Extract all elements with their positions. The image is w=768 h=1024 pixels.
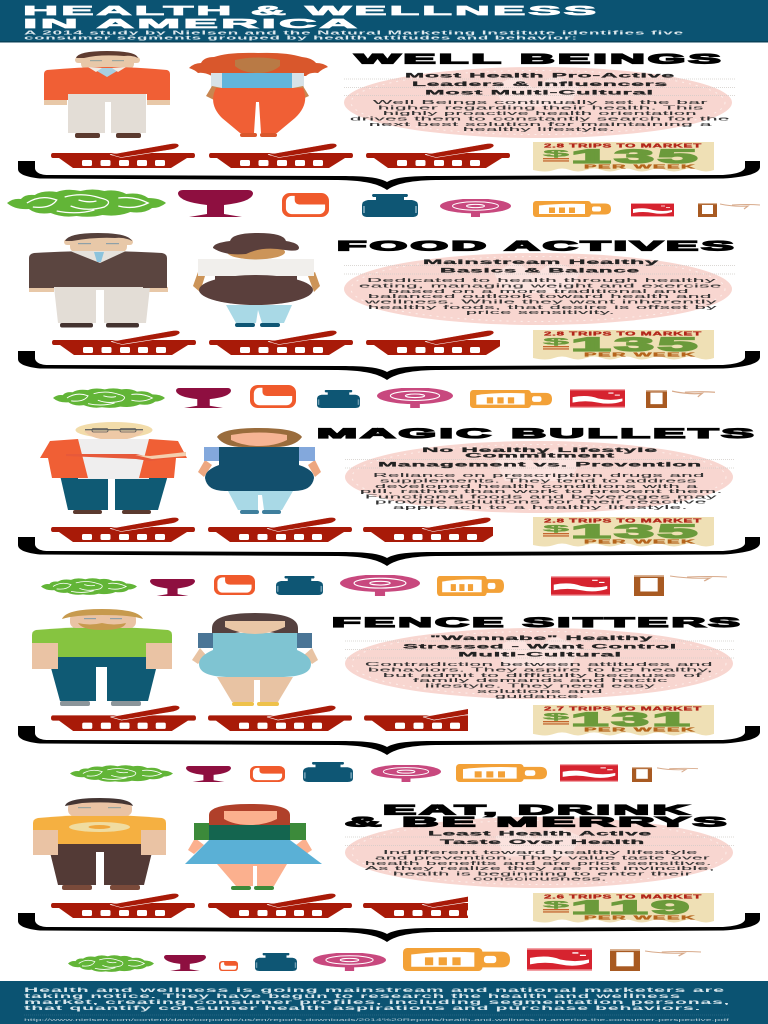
traits and description: and prevention. They value taste over [375, 856, 710, 862]
traits and description: Well Beings continually set the bar [373, 100, 708, 106]
curly brace [18, 726, 760, 755]
figure: woman in light blue dress [192, 613, 318, 706]
figure: man with glasses and orange jacket [40, 422, 187, 514]
price tag: $ [543, 712, 569, 722]
traits and description [345, 830, 735, 882]
traits and description: health benefits and are price sensitive. [365, 861, 713, 867]
price tag: $ [543, 336, 569, 346]
traits and description: family demands and hectic [413, 678, 668, 684]
heading: & BE MERRYS [345, 814, 730, 830]
traits and description: highly proactive health orientation [383, 111, 697, 117]
figure: man in yellow shirt [33, 798, 166, 890]
intro text: A 2014 study by Nielsen and the Natural Marketing Institute identifies five [24, 30, 685, 36]
traits and description: Commitment [465, 452, 617, 460]
price tag: $ [543, 148, 569, 158]
heading: FENCE SITTERS [332, 615, 743, 630]
curly brace [18, 913, 760, 942]
traits and description: Taste Over Health [440, 839, 645, 846]
traits and description: Leaders & Influencers [412, 81, 669, 88]
price tag: 2.8 TRIPS TO MARKET [544, 144, 703, 150]
price tag [533, 142, 714, 172]
footer band [0, 981, 768, 1024]
figure: woman with red hair [189, 53, 328, 137]
figure: woman in blue dress [198, 428, 321, 514]
footer text: that quantify consumer health aspirations and purchase behaviors. [24, 1005, 701, 1012]
price tag: 2.8 TRIPS TO MARKET [544, 518, 703, 524]
panel: food actives [18, 233, 760, 408]
price tag: 131 [571, 710, 693, 731]
traits and description [345, 447, 735, 511]
traits and description: As they realize they are not invincible, [365, 866, 716, 872]
curly brace [18, 161, 760, 190]
price tag: 2.6 TRIPS TO MARKET [544, 894, 703, 900]
icons: food row [68, 948, 701, 972]
traits and description: provide solutions for their reactive [375, 500, 709, 506]
traits and description: based on a more traditional and [388, 289, 689, 295]
traits and description: eating, managing weight and exercise [359, 284, 724, 290]
traits and description: developed health conditions with a [375, 484, 700, 490]
price tag: PER WEEK [584, 727, 696, 733]
traits and description: solutions and [477, 689, 603, 695]
description oval [345, 628, 733, 699]
price tag [533, 893, 714, 922]
traits and description: Most Health Pro-Active [405, 72, 676, 80]
price tag: $ [543, 900, 569, 910]
price tag: $ [543, 524, 569, 534]
price tag [533, 330, 714, 360]
traits and description: Functional foods and beverages may [365, 494, 717, 500]
intro text [24, 30, 685, 42]
traits and description: healthy foods, that desire is offset by [368, 305, 717, 311]
footer text: market, creating consumer profiles, including segmentation personas, [24, 999, 730, 1006]
traits and description: Management vs. Prevention [378, 462, 702, 468]
figure: man in brown suit [29, 233, 168, 328]
heading: MAGIC BULLETS [317, 426, 757, 441]
footer text: taking notice. They have begun to research the health and wellness [24, 993, 681, 1000]
price tag [533, 705, 714, 735]
panel: well beings [7, 51, 760, 217]
traits and description [344, 72, 735, 133]
description oval [344, 67, 732, 138]
price tag: 135 [571, 147, 701, 168]
heading [345, 802, 730, 830]
price tag: 2.8 TRIPS TO MARKET [544, 332, 703, 338]
price tag: PER WEEK [584, 352, 696, 358]
curly brace [18, 351, 760, 380]
traits and description: price sensitivity. [466, 310, 615, 316]
title [23, 3, 599, 31]
shopping baskets [51, 143, 510, 168]
traits and description: Most Multi-Cultural [425, 90, 654, 96]
traits and description: health is beginning to enter their [393, 872, 692, 878]
traits and description: balanced outlook toward health and [368, 294, 712, 300]
price tag: 2.7 TRIPS TO MARKET [544, 706, 703, 712]
description oval [345, 441, 733, 513]
footer text: Health and wellness is going mainstream and national marketers are [24, 987, 725, 994]
description oval [345, 817, 733, 888]
shopping baskets [51, 893, 507, 918]
price tag: PER WEEK [584, 915, 696, 921]
panel: magic bullets [18, 422, 760, 596]
price tag: PER WEEK [584, 539, 696, 545]
header band [0, 0, 768, 42]
figure: man in orange sweater [44, 51, 170, 138]
panel: fence sitters [18, 609, 760, 782]
traits and description: "Wannabe" Healthy [430, 635, 654, 642]
title: HEALTH & WELLNESS [23, 3, 599, 18]
figure: woman in blue skirt [185, 804, 322, 890]
traits and description: Contradiction between attitudes and [365, 662, 713, 668]
traits and description [344, 259, 735, 316]
traits and description: Stressed - Want Control [403, 644, 677, 650]
traits and description: supplements. They tend to address [380, 478, 697, 484]
traits and description: lifestyle. They need easy [425, 684, 655, 690]
traits and description: Indifferent toward healthy lifestyle [383, 850, 700, 856]
traits and description: higher regarding their health. This [378, 106, 704, 112]
traits and description: approach to a healthy lifestyle. [393, 505, 689, 511]
shopping baskets [51, 517, 507, 542]
heading: WELL BEINGS [355, 52, 724, 66]
icons: food row [70, 762, 698, 782]
source url: http://www.nielsen.com/content/dam/corporate/us/en/reports-downloads/2014%20Reports/health-and-wellness-in-america-the-consumer-perspective.pdf [24, 1018, 729, 1022]
traits and description: Least Health Active [428, 830, 653, 838]
traits and description: behaviors. They aspire to be healthy, [368, 668, 714, 674]
icons: food row [7, 190, 760, 217]
traits and description: Dedicated to health through healthy [367, 278, 716, 284]
icons: food row [41, 574, 727, 596]
shopping baskets [51, 705, 508, 731]
traits and description: next best solution for maintaining a [369, 122, 714, 128]
traits and description: wellness. While they want inherently [362, 300, 717, 306]
price tag: PER WEEK [584, 164, 696, 170]
heading: EAT, DRINK [383, 802, 692, 818]
traits and description: Multi-Cultural [458, 652, 622, 658]
curly brace [18, 537, 760, 566]
traits and description: consciousness. [473, 876, 607, 882]
figure: woman in brown skirt [193, 233, 320, 327]
panel: eat, drink and be merrys [18, 798, 760, 972]
intro text: consumer segments grouped by health attitudes and behavior: [24, 36, 578, 42]
traits and description: Basics & Balance [440, 268, 641, 274]
traits and description: pill, rather than work to prevent them. [360, 489, 724, 495]
traits and description: Mainstream Healthy [423, 259, 660, 266]
price tag [533, 517, 714, 546]
traits and description: No Healthy Lifestyle [422, 447, 659, 454]
traits and description: drives them to constantly search for the [350, 116, 732, 122]
figure: bearded man in green shirt [32, 609, 172, 706]
traits and description: Reliance on prescription drugs and [373, 473, 705, 479]
price tag: 119 [571, 898, 693, 919]
traits and description: guidance. [495, 694, 585, 700]
shopping baskets [52, 330, 510, 355]
footer text [24, 987, 730, 1012]
traits and description: but admit to difficulty because of [383, 673, 703, 679]
title: IN AMERICA [23, 16, 360, 31]
traits and description: healthy lifestyle. [463, 127, 616, 133]
heading: FOOD ACTIVES [337, 238, 737, 254]
traits and description [345, 635, 735, 700]
price tag: 135 [571, 335, 701, 356]
icons: food row [53, 385, 715, 408]
price tag: 135 [571, 522, 701, 543]
description oval [344, 253, 732, 325]
